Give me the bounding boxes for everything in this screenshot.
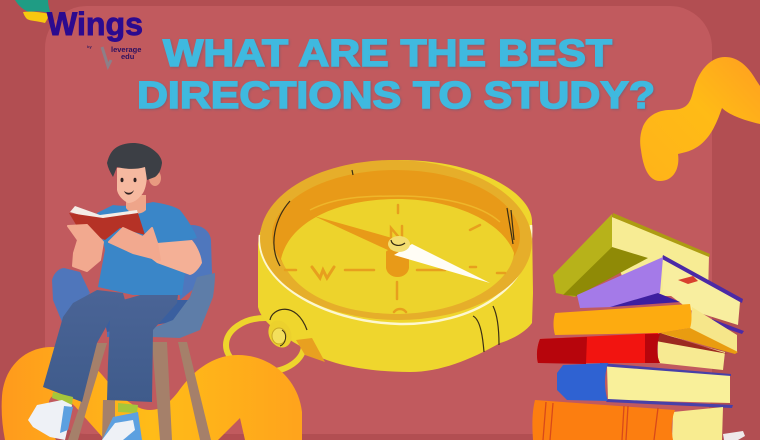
compass inner wall <box>272 170 520 302</box>
leverage edu <box>102 45 141 66</box>
white page scrap <box>723 431 745 440</box>
compass outer rim <box>259 158 533 322</box>
title <box>137 33 655 117</box>
blue book <box>557 363 733 408</box>
compass face <box>281 199 514 314</box>
green socks <box>52 392 138 413</box>
left hand and forearm <box>68 225 103 271</box>
by: by <box>87 44 92 49</box>
face thin highlight <box>310 196 500 222</box>
hair <box>107 143 162 180</box>
jeans <box>43 290 178 402</box>
squiggle top right <box>640 57 760 181</box>
open red book <box>69 206 145 240</box>
neck <box>126 195 146 214</box>
squiggle bottom left <box>2 347 302 440</box>
eyes and mouth <box>120 178 136 195</box>
leverage edu: leverage <box>111 45 141 54</box>
purple book <box>577 255 744 334</box>
head <box>107 143 162 203</box>
right hand <box>109 228 160 260</box>
person reading on chair <box>28 143 215 440</box>
compass black line details <box>270 170 514 352</box>
title: WHAT ARE THE BEST <box>163 33 612 75</box>
yellow-orange book <box>554 304 738 354</box>
logo: Wings by leverage edu <box>15 0 143 66</box>
compass crown <box>264 317 325 362</box>
logo mark <box>15 0 51 23</box>
compass body <box>258 160 533 372</box>
stack of books <box>532 213 745 440</box>
bottom orange book <box>532 400 723 440</box>
olive book <box>553 213 710 297</box>
compass needle <box>314 216 490 283</box>
white rim highlight <box>260 225 531 324</box>
chair <box>52 225 215 338</box>
compass ring loop <box>226 318 304 372</box>
chair legs <box>68 342 211 440</box>
near arm <box>140 240 202 275</box>
t-shirt <box>97 202 197 295</box>
title: DIRECTIONS TO STUDY? <box>137 75 655 117</box>
leverage edu: edu <box>121 52 135 61</box>
sneakers <box>28 400 142 440</box>
red book <box>537 333 728 370</box>
compass <box>226 158 533 372</box>
compass markings <box>285 205 505 312</box>
hands <box>68 225 160 271</box>
logo wordmark: Wings <box>47 6 143 42</box>
